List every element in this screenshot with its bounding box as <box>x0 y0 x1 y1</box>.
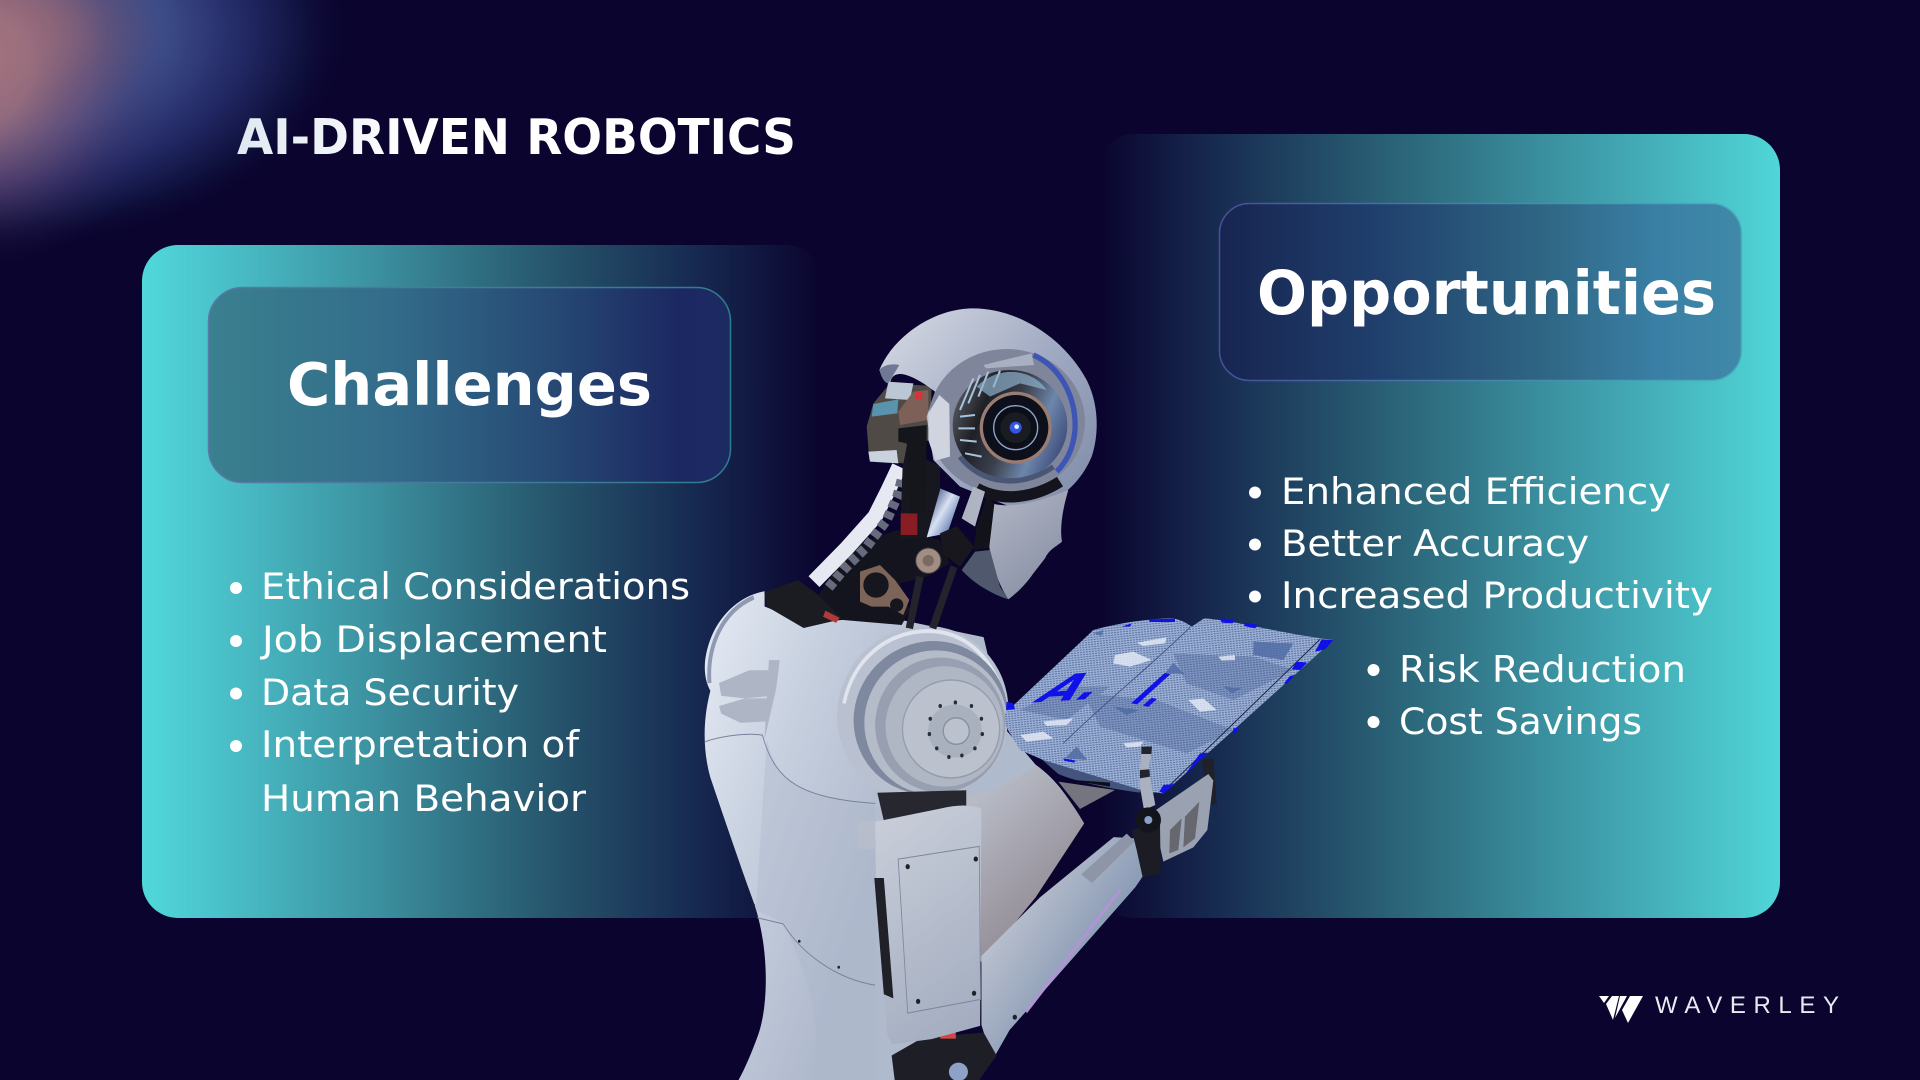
shoulder hub <box>928 704 982 758</box>
gear lower hub <box>890 598 903 612</box>
hand plate <box>1156 774 1213 862</box>
book shadow bands <box>1020 653 1293 753</box>
wrist knob <box>1136 807 1161 833</box>
eye copper ring <box>980 392 1052 464</box>
heading box: opportunities <box>1220 204 1742 380</box>
list: opportunities: Increased Productivity <box>1281 574 1713 617</box>
dome inner shadow <box>879 364 899 383</box>
elbow red <box>940 1027 956 1039</box>
wrist <box>1132 823 1161 877</box>
list: opportunities <box>1249 470 1713 743</box>
eye dark <box>983 395 1048 460</box>
list: challenges: Job Displacement <box>260 618 607 661</box>
under-eye band <box>977 482 1060 497</box>
shoulder hub centre <box>943 718 969 744</box>
glow: top-left blue <box>0 0 360 255</box>
control box red mark <box>823 611 840 623</box>
temple copper <box>898 390 928 425</box>
back shading <box>756 739 875 1080</box>
chest <box>966 765 1084 964</box>
list: challenges: Data Security <box>261 671 519 714</box>
piston <box>898 425 927 513</box>
shoulder rim band <box>709 597 754 683</box>
neck chrome <box>927 488 960 537</box>
ear blue edge <box>1033 355 1075 472</box>
panel background: challenges <box>142 245 822 918</box>
temple chrome lower <box>868 450 898 463</box>
fingers back <box>1202 758 1217 807</box>
book underside <box>1042 759 1143 793</box>
heading box: challenges: Challenges <box>287 350 652 419</box>
neck strap <box>940 526 974 567</box>
book slit <box>1065 779 1110 787</box>
shoulder ring <box>847 632 1014 803</box>
back vents <box>719 660 780 739</box>
book title I: I. <box>1117 664 1195 717</box>
book spine line <box>1063 627 1190 743</box>
list: challenges: Ethical Considerations <box>261 565 690 608</box>
ear top plate <box>983 353 1034 368</box>
temple chrome <box>872 399 898 417</box>
list: opportunities: Enhanced Efficiency <box>1281 470 1671 513</box>
shoulder control box <box>765 580 841 628</box>
list: opportunities: Cost Savings <box>1399 700 1642 743</box>
book blue marks <box>1006 618 1333 793</box>
face <box>989 490 1068 599</box>
robot head <box>814 308 1097 628</box>
upper arm plate <box>875 806 981 1044</box>
jaw chrome <box>962 550 1008 599</box>
temple highlight <box>885 382 913 400</box>
temple red dot <box>915 392 922 400</box>
list: challenges <box>230 565 690 820</box>
book light patches <box>1020 637 1235 747</box>
list: opportunities: Better Accuracy <box>1281 522 1589 565</box>
dome <box>879 308 1097 507</box>
elbow joint <box>892 1033 997 1080</box>
robot figure <box>705 308 1333 1080</box>
book title A: A. <box>1022 663 1128 712</box>
upper arm slot <box>874 878 893 998</box>
robot body <box>705 580 1153 1080</box>
shoulder hub dots <box>928 700 984 759</box>
shoulder collar <box>830 616 1016 812</box>
neck dark <box>900 447 940 540</box>
upper arm rivets <box>752 857 1017 1020</box>
gear <box>860 565 909 615</box>
logo: Waverley <box>1599 992 1839 1023</box>
forearm <box>981 837 1153 1061</box>
gear hub <box>863 572 889 598</box>
hand grooves <box>1169 802 1199 853</box>
elbow lens <box>949 1063 968 1080</box>
book pages <box>1005 618 1333 793</box>
neck copper joint <box>916 548 941 573</box>
metal top highlight <box>977 372 1047 397</box>
lower ring <box>960 457 1053 481</box>
list: challenges: Interpretation of <box>261 723 580 766</box>
eye pupil <box>1010 422 1022 434</box>
spine base mechanics <box>818 530 950 625</box>
back seams <box>705 734 875 985</box>
list: challenges: Human Behavior <box>261 777 586 820</box>
shoulder disc outer <box>864 650 1007 795</box>
panel: challenges <box>142 245 822 918</box>
panel: opportunities <box>1098 134 1780 918</box>
spine chrome <box>827 480 902 590</box>
forearm light strip <box>1026 890 1120 1012</box>
forearm panel <box>1081 834 1135 883</box>
eye iris <box>1000 412 1031 443</box>
jaw dark <box>973 497 995 550</box>
mechanical temple block <box>867 383 932 463</box>
upper arm panel line <box>898 846 981 1013</box>
metal disc stripes <box>958 371 1000 457</box>
heading box: challenges <box>208 288 730 482</box>
panel background: opportunities <box>1098 134 1780 918</box>
eye pale ring <box>994 406 1038 450</box>
rods <box>909 567 954 628</box>
heading box: opportunities: Opportunities <box>1257 258 1716 329</box>
logo wordmark: WAVERLEY <box>1655 992 1839 1019</box>
torso <box>705 591 1083 1080</box>
shoulder collar highlight <box>844 631 999 703</box>
book edge <box>1167 639 1320 788</box>
eye highlight <box>1014 424 1019 429</box>
arm joint <box>877 790 966 821</box>
neck copper centre <box>923 555 934 566</box>
book and hand <box>1005 618 1333 877</box>
list: opportunities: Risk Reduction <box>1399 648 1686 691</box>
book dark patches <box>1065 630 1293 760</box>
ear plate <box>928 395 950 461</box>
finger <box>1139 747 1155 810</box>
glow: top-left pink <box>0 0 170 270</box>
metal disc <box>953 370 1067 480</box>
neck red wires <box>901 513 917 535</box>
title: AI-DRIVEN ROBOTICS <box>237 109 796 166</box>
upper-arm block <box>858 821 875 849</box>
shoulder disc inner <box>886 666 1004 787</box>
finger joints <box>1140 747 1152 778</box>
wrist knob cap <box>1144 816 1152 824</box>
shoulder rings <box>902 680 1000 778</box>
spine <box>814 467 899 582</box>
ear ring outer <box>928 349 1085 494</box>
cheek chrome <box>962 487 985 527</box>
logo mark <box>1599 996 1643 1023</box>
shoulder disc <box>875 658 1005 792</box>
book support <box>1058 782 1115 809</box>
